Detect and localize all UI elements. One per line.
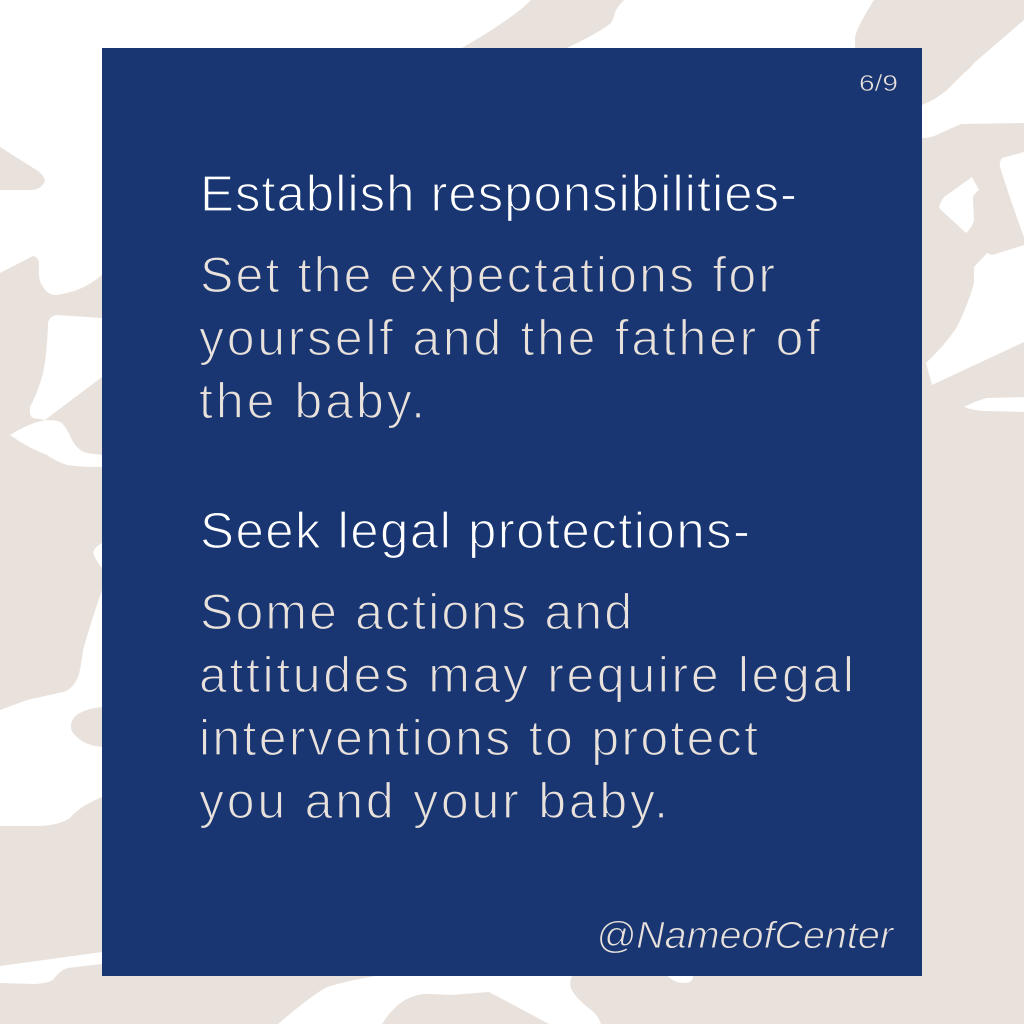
text block: legal interventions: you and your baby. xyxy=(199,773,668,829)
panel: navy content card xyxy=(102,48,922,976)
text block: legal interventions: attitudes may require legal xyxy=(199,647,854,703)
text block: expectations: Set the expectations for xyxy=(200,247,775,303)
text block: legal interventions: interventions to protect xyxy=(199,710,758,766)
page number: 6/9 xyxy=(859,70,898,96)
text block: legal interventions xyxy=(199,584,854,829)
handle: social account: @NameofCenter xyxy=(596,915,894,957)
text block: expectations: the baby. xyxy=(199,373,425,429)
heading: seek legal protections: Seek legal protections- xyxy=(200,502,750,559)
text block: expectations xyxy=(199,247,820,429)
text block: legal interventions: Some actions and xyxy=(200,584,632,640)
text block: expectations: yourself and the father of xyxy=(199,310,820,366)
heading: establish responsibilities: Establish responsibilities- xyxy=(200,165,797,222)
